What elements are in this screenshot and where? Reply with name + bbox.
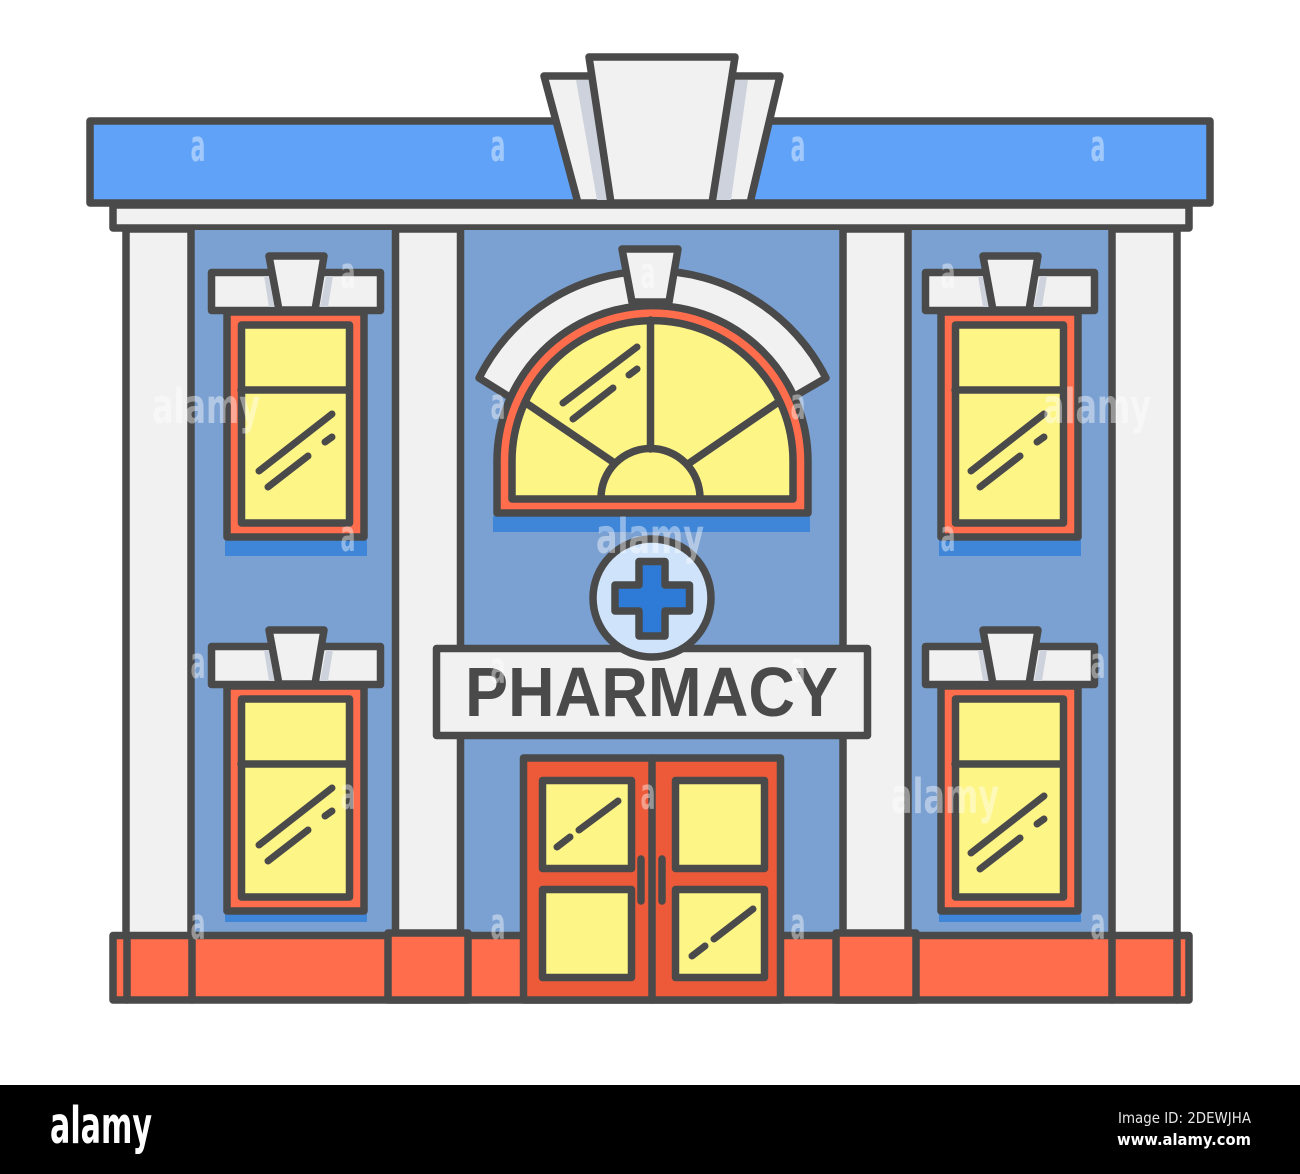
watermarks: alamy: [1043, 379, 1151, 435]
window: upper left: [212, 256, 380, 556]
watermarks: a: [490, 121, 506, 172]
plinth: [113, 933, 1189, 1000]
arch moulding: [479, 271, 826, 396]
arched window: [479, 249, 826, 532]
watermarks: a: [190, 638, 206, 689]
website: www.alamy.com: [1117, 1130, 1251, 1149]
arch keystone: [622, 249, 678, 302]
image id: Image ID: 2DEWJHA: [1118, 1109, 1252, 1127]
watermarks: a: [1090, 121, 1106, 172]
watermarks: a: [340, 769, 356, 820]
columns: [126, 229, 1177, 936]
watermarks: a: [190, 121, 206, 172]
watermarks: a: [790, 899, 806, 950]
wall: [191, 230, 1112, 936]
watermarks: a: [940, 248, 956, 299]
roof keystone: [544, 57, 780, 203]
arch frame: [497, 306, 808, 513]
watermarks: a: [490, 899, 506, 950]
arch shadow: [493, 516, 810, 532]
watermarks: alamy: [596, 509, 704, 565]
pharmacy sign: PHARMACY: [465, 653, 838, 731]
watermarks: [152, 121, 1151, 950]
footer bar: [0, 1085, 1300, 1174]
window: upper right: [926, 256, 1094, 556]
footer logo: alamy: [50, 1097, 152, 1156]
door: [524, 758, 780, 1000]
watermarks: a: [340, 248, 356, 299]
arch glass glare: [563, 347, 637, 419]
arch glass: [512, 321, 793, 499]
watermarks: alamy: [152, 379, 260, 435]
watermarks: a: [640, 248, 656, 299]
watermarks: a: [790, 121, 806, 172]
watermarks: a: [340, 511, 356, 562]
watermarks: a: [1090, 638, 1106, 689]
watermarks: a: [490, 643, 506, 694]
roof band: [90, 121, 1210, 203]
watermarks: a: [790, 379, 806, 430]
watermarks: a: [790, 643, 806, 694]
watermarks: a: [640, 769, 656, 820]
watermarks: a: [940, 511, 956, 562]
cornice: [113, 205, 1189, 228]
watermarks: alamy: [891, 769, 999, 825]
arch mullions: [526, 320, 777, 498]
watermarks: a: [1090, 899, 1106, 950]
medical cross badge: [593, 539, 711, 657]
watermarks: a: [490, 379, 506, 430]
window: lower left: [212, 630, 380, 922]
window: lower right: [926, 630, 1094, 922]
watermarks: a: [190, 899, 206, 950]
